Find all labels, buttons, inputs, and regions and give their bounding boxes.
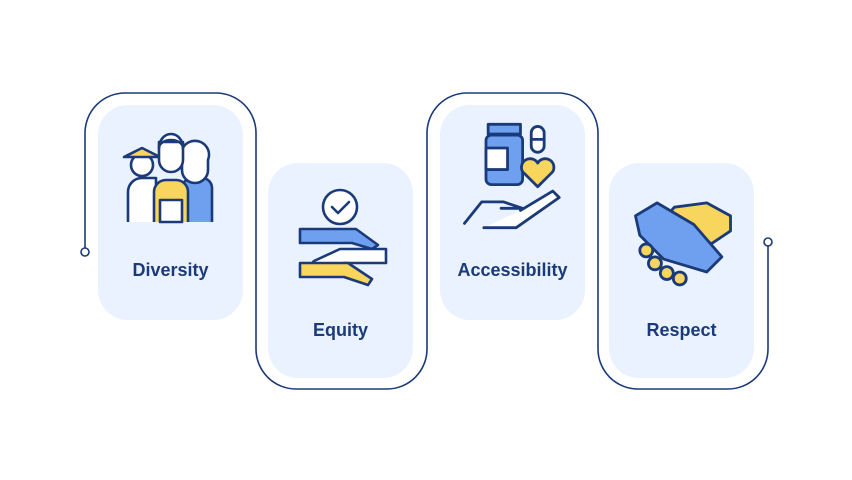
label: Equity: Equity xyxy=(313,320,368,340)
icon: medicine in hand xyxy=(463,122,561,230)
icon: people xyxy=(122,132,214,224)
label: Diversity: Diversity xyxy=(132,260,209,280)
label: Accessibility: Accessibility xyxy=(457,260,568,280)
card: Equity xyxy=(268,163,413,378)
icon: hands with check xyxy=(298,188,388,286)
card: Diversity xyxy=(98,105,243,320)
card: Accessibility xyxy=(440,105,585,320)
icon: handshake xyxy=(634,202,732,286)
label: Respect: Respect xyxy=(646,320,717,340)
card: Respect xyxy=(609,163,754,378)
